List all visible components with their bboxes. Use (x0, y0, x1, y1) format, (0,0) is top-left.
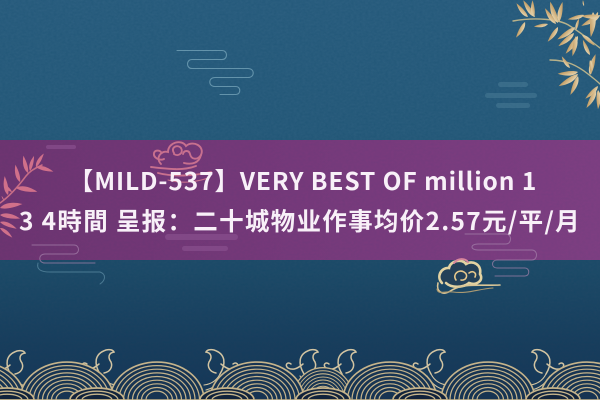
mist bars inside band (46, 145, 238, 251)
icon: pink auspicious cloud (151, 142, 211, 182)
decorative cloud lines: lower left and lower right (32, 234, 536, 284)
icon: pink bamboo branch, left (0, 152, 54, 239)
wave crests (0, 350, 564, 391)
wave scales, upper row (0, 362, 600, 400)
wave pattern: bottom border (0, 350, 600, 400)
decorative mist bars: upper right (485, 82, 537, 108)
title (19, 163, 581, 238)
icon: gold auspicious cloud (437, 259, 500, 293)
title: 【MILD-537】VERY BEST OF million 1 (69, 163, 537, 198)
wave scales, lower row (0, 388, 580, 400)
decorative cloud line: upper centre (177, 50, 253, 94)
title: 3 4時間 呈报：二十城物业作事均价2.57元/平/月 (19, 203, 581, 238)
icon: bamboo branch, upper right (513, 0, 600, 109)
panel: purple title band (0, 140, 600, 260)
